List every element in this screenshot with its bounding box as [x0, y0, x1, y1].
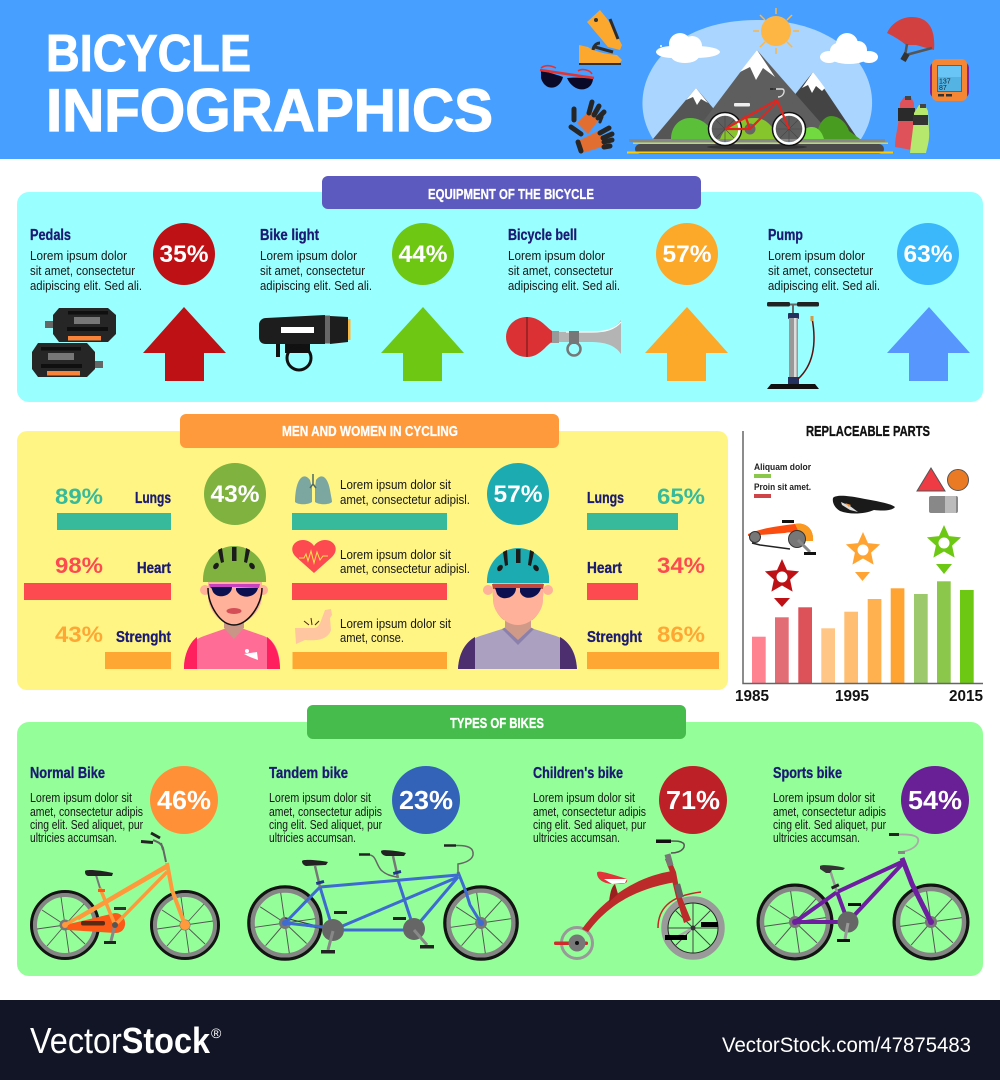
item: bicycle bell: sit amet, consectetur	[508, 264, 613, 278]
panel: equipment of the bicycle	[17, 176, 983, 402]
stats: women: 89%	[55, 484, 103, 509]
item: tandem bike: cing elit. Sed aliquet, pur	[269, 818, 382, 832]
stats: women: 98%	[55, 553, 103, 578]
item: pump: adipiscing elit. Sed ali.	[768, 279, 880, 293]
stats: men: 65%	[657, 484, 705, 509]
bar chart: 2015	[949, 688, 983, 705]
marker: orange star	[846, 532, 880, 581]
item: children's bike: Lorem ipsum dolor sit	[533, 791, 635, 805]
item: pump: sit amet, consectetur	[768, 264, 873, 278]
arrow: green	[381, 307, 464, 381]
icon: bike computer	[930, 59, 969, 101]
stats: men: 34%	[657, 553, 705, 578]
icon: saddle	[833, 496, 895, 514]
panel: types of bikes	[17, 705, 983, 976]
percent: men 57%	[487, 463, 549, 525]
header band	[0, 0, 1000, 159]
item: children's bike: cing elit. Sed aliquet, pur	[533, 818, 646, 832]
item: tandem bike: 23%	[399, 785, 453, 815]
item: bike light: Bike light	[260, 227, 319, 244]
item: pedals: adipiscing elit. Sed ali.	[30, 279, 142, 293]
bars and text: shared health stats: amet, consectetur adipisl.	[340, 562, 470, 576]
item: children's bike: amet, consectetur adipis	[533, 805, 646, 819]
percent: women 43%	[204, 463, 266, 525]
legend	[754, 462, 811, 498]
figure: man cyclist	[458, 548, 577, 669]
stats: men: 86%	[657, 622, 705, 647]
item: bike light: Lorem ipsum dolor	[260, 249, 357, 263]
item: tandem bike: Tandem bike	[269, 765, 348, 782]
percent: women 43%: 43%	[210, 481, 260, 508]
item: pump	[767, 223, 970, 389]
item: tandem bike: Lorem ipsum dolor sit	[269, 791, 371, 805]
bar chart: 1985	[735, 688, 769, 705]
item: pedals: Lorem ipsum dolor	[30, 249, 127, 263]
item: pump: 63%	[904, 241, 952, 268]
illustration: orange bike	[32, 833, 218, 958]
item: sports bike: amet, consectetur adipis	[773, 805, 886, 819]
item: tandem bike	[249, 765, 517, 959]
item: normal bike: Normal Bike	[30, 765, 105, 782]
stats: women: Strenght	[116, 629, 171, 646]
stats: women	[24, 484, 171, 669]
item: pump: Lorem ipsum dolor	[768, 249, 865, 263]
panel: replaceable parts chart	[735, 423, 983, 705]
item: normal bike: amet, consectetur adipis	[30, 805, 143, 819]
bars and text: shared health stats: Lorem ipsum dolor sit	[340, 548, 451, 562]
stats: women: 43%	[55, 622, 103, 647]
footer: stock watermark	[0, 1000, 1000, 1080]
item: sports bike: Sports bike	[773, 765, 842, 782]
scene: mountains, sun and bicycle	[627, 8, 893, 154]
heading bar: equipment	[322, 176, 701, 209]
item: sports bike: Lorem ipsum dolor sit	[773, 791, 875, 805]
item: bicycle bell: Bicycle bell	[508, 227, 577, 244]
heading bar: men and women: MEN AND WOMEN IN CYCLING	[282, 424, 458, 440]
item: normal bike: Lorem ipsum dolor sit	[30, 791, 132, 805]
legend: Proin sit amet.	[754, 482, 811, 493]
item: pump: Pump	[768, 227, 803, 244]
percent: men 57%: 57%	[494, 481, 542, 508]
icon: red helmet	[887, 17, 934, 62]
item: children's bike: 71%	[666, 785, 720, 815]
heading bar: types of bikes	[307, 705, 686, 739]
bar chart: 1995	[835, 688, 869, 705]
illustration: blue tandem	[249, 845, 517, 959]
stats: men: Heart	[587, 560, 622, 577]
item: children's bike: Children's bike	[533, 765, 623, 782]
item: sports bike	[758, 765, 969, 959]
arrow: red	[143, 307, 226, 381]
item: bike light: 44%	[398, 241, 448, 268]
icon: pedals	[32, 308, 116, 377]
footer: stock watermark: ®	[211, 1025, 222, 1041]
footer: stock watermark: VectorStock	[30, 1020, 211, 1061]
icon: flexed arm	[295, 609, 332, 644]
heading bar: equipment: EQUIPMENT OF THE BICYCLE	[428, 187, 594, 203]
icon: chain and crank	[748, 520, 816, 555]
item: sports bike: 54%	[908, 785, 962, 815]
item: bike light: adipiscing elit. Sed ali.	[260, 279, 372, 293]
illustration: red tricycle	[554, 840, 722, 958]
chart heading: REPLACEABLE PARTS	[806, 423, 930, 440]
item: bicycle bell: adipiscing elit. Sed ali.	[508, 279, 620, 293]
item: pedals: 35%	[160, 241, 208, 268]
icon: bike computer: 87	[939, 85, 947, 92]
stats: men	[587, 484, 719, 669]
icon: cycling shoes	[579, 10, 622, 65]
stats: men: Lungs	[587, 490, 624, 507]
item: bicycle bell: 57%	[662, 241, 712, 268]
title: INFOGRAPHICS	[46, 77, 493, 144]
heading bar: men and women	[180, 414, 559, 448]
item: normal bike: cing elit. Sed aliquet, pur	[30, 818, 143, 832]
icon: bike light	[259, 315, 350, 370]
scene bicycle	[707, 89, 807, 150]
bars and text: shared health stats: amet, conse.	[340, 631, 404, 645]
icon: lungs	[295, 474, 332, 504]
item: sports bike: ultricies accumsan.	[773, 831, 860, 845]
icon: cycling gloves	[571, 102, 612, 153]
legend: Aliquam dolor	[754, 462, 811, 473]
item: tandem bike: ultricies accumsan.	[269, 831, 356, 845]
icon: bike computer: 137	[939, 78, 951, 86]
bars and text: shared health stats: Lorem ipsum dolor sit	[340, 478, 451, 492]
icon: sports bottles	[895, 96, 929, 153]
bars and text: shared health stats: amet, consectetur adipisl.	[340, 493, 470, 507]
icon: sunglasses	[540, 66, 594, 89]
title	[46, 25, 493, 144]
item: bicycle bell	[506, 223, 728, 381]
illustration: purple bike	[758, 834, 968, 959]
item: normal bike: 46%	[157, 785, 211, 815]
item: pedals: Pedals	[30, 227, 71, 244]
arrow: blue	[887, 307, 970, 381]
marker: red star	[765, 559, 799, 607]
item: normal bike	[30, 765, 218, 958]
item: sports bike: cing elit. Sed aliquet, pur	[773, 818, 886, 832]
bars and text: shared health stats	[292, 474, 470, 669]
item: children's bike: ultricies accumsan.	[533, 831, 620, 845]
arrow: orange	[645, 307, 728, 381]
item: normal bike: ultricies accumsan.	[30, 831, 117, 845]
stats: men: Strenght	[587, 629, 642, 646]
bars and text: shared health stats: Lorem ipsum dolor sit	[340, 617, 451, 631]
item: children's bike	[533, 765, 727, 958]
icon: reflectors	[917, 468, 968, 513]
stats: women: Heart	[137, 560, 171, 577]
footer: stock watermark: VectorStock.com/47875483	[722, 1034, 971, 1057]
stats: women: Lungs	[135, 490, 171, 507]
item: pedals: sit amet, consectetur	[30, 264, 135, 278]
bar chart	[735, 431, 983, 705]
icon: bicycle horn	[506, 317, 621, 357]
item: bike light: sit amet, consectetur	[260, 264, 365, 278]
item: pedals	[30, 223, 226, 381]
figure: woman cyclist	[184, 546, 280, 669]
icon: heart	[292, 540, 336, 573]
item: bicycle bell: Lorem ipsum dolor	[508, 249, 605, 263]
title: BICYCLE	[46, 25, 251, 83]
marker: green star	[927, 525, 961, 574]
heading bar: types of bikes: TYPES OF BIKES	[450, 716, 544, 732]
item: tandem bike: amet, consectetur adipis	[269, 805, 382, 819]
panel: men and women in cycling	[17, 414, 728, 690]
icon: floor pump	[767, 302, 819, 389]
item: bike light	[259, 223, 464, 381]
